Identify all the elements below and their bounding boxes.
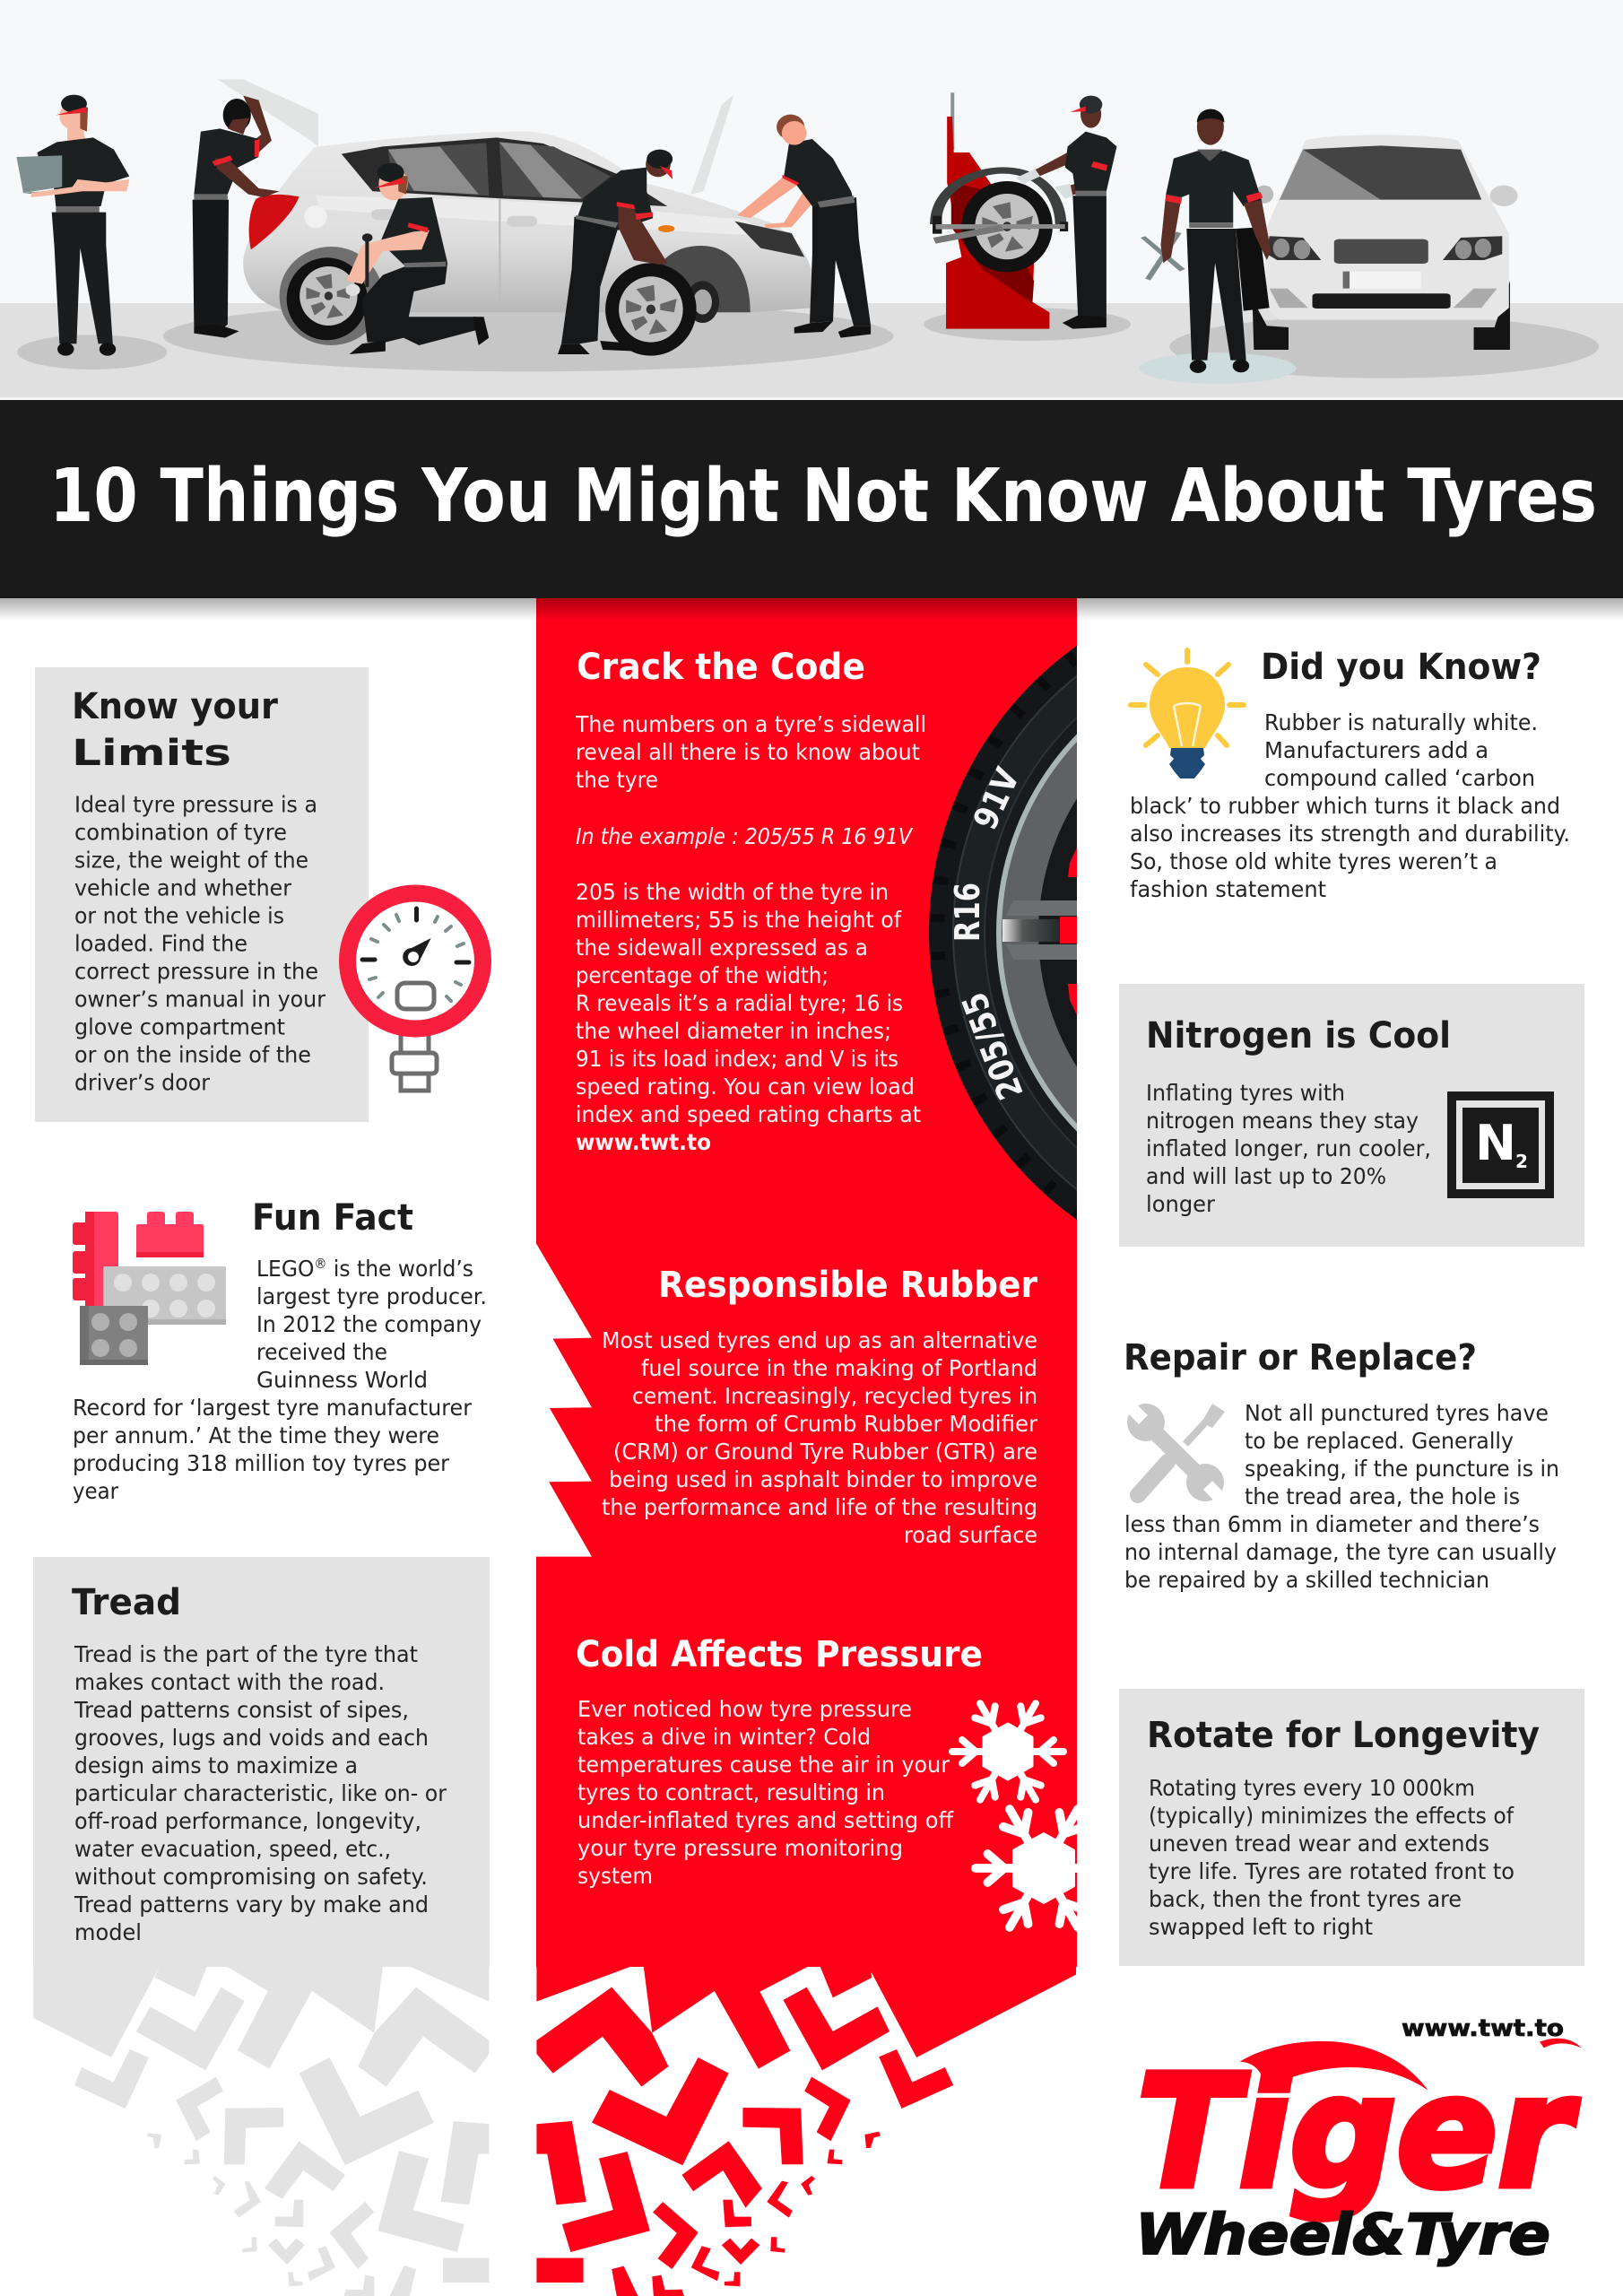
panel: crack the code xyxy=(575,647,926,1155)
heading: Cold Affects Pressure xyxy=(576,1634,983,1675)
body text: less than 6mm in diameter and there’s xyxy=(1124,1511,1540,1537)
header illustration: mechanics working on cars xyxy=(0,0,1623,400)
body text: tyres to contract, resulting in xyxy=(577,1779,885,1805)
body text: Ideal tyre pressure is a xyxy=(74,791,317,818)
body text: Record for ‘largest tyre manufacturer xyxy=(73,1395,473,1421)
panel: did you know xyxy=(1130,647,1570,902)
body text: glove compartment xyxy=(74,1013,285,1040)
icon: tyre pressure gauge xyxy=(348,893,482,1091)
body text: 205 is the width of the tyre in xyxy=(576,879,889,905)
body text xyxy=(575,711,926,1155)
body text xyxy=(74,791,326,1096)
body text: the form of Crumb Rubber Modifier xyxy=(655,1411,1038,1437)
panel: fun fact xyxy=(73,1197,487,1504)
body text: R reveals it’s a radial tyre; 16 is xyxy=(576,990,903,1016)
body text xyxy=(1146,1080,1431,1217)
body text: makes contact with the road. xyxy=(74,1669,385,1695)
body text: reveal all there is to know about xyxy=(576,739,920,765)
image: tyre sidewall xyxy=(929,646,1077,1220)
body text: loaded. Find the xyxy=(74,931,247,956)
body text: compound called ‘carbon xyxy=(1264,765,1535,791)
heading: Crack the Code xyxy=(577,647,865,688)
panel: red centre column xyxy=(535,598,1077,2296)
body text: or not the vehicle is xyxy=(74,902,284,929)
illustration: side view car and four mechanics xyxy=(16,79,893,371)
panel: know your limits xyxy=(35,667,369,1122)
body text: speed rating. You can view load xyxy=(576,1074,915,1100)
figure: mechanic leaning on bonnet xyxy=(737,115,871,338)
body text: received the xyxy=(256,1339,387,1365)
body text: largest tyre producer. xyxy=(256,1283,487,1309)
body text xyxy=(1130,709,1570,902)
figure: balancing machine with wheel xyxy=(933,92,1068,329)
body text: Ever noticed how tyre pressure xyxy=(577,1696,912,1722)
panel: responsible rubber xyxy=(602,1265,1038,1548)
body text: ® xyxy=(314,1256,326,1272)
body text: no internal damage, the tyre can usually xyxy=(1124,1539,1557,1565)
heading: Know your xyxy=(72,686,278,727)
body text: Tread patterns vary by make and xyxy=(74,1892,429,1918)
body text: road surface xyxy=(904,1522,1037,1548)
body text: Not all punctured tyres have xyxy=(1245,1400,1549,1426)
body text: off-road performance, longevity, xyxy=(74,1808,421,1834)
tyre label: R16: R16 xyxy=(948,883,987,942)
icon: snowflake xyxy=(952,1698,1063,1805)
body text: is the world’s xyxy=(326,1256,473,1282)
body text: system xyxy=(577,1863,653,1889)
icon: N2 element tile: 2 xyxy=(1515,1151,1528,1172)
body text: longer xyxy=(1146,1191,1216,1217)
panel: nitrogen is cool xyxy=(1119,984,1584,1247)
heading: Rotate for Longevity xyxy=(1147,1715,1540,1756)
logo url: www.twt.to xyxy=(1402,2015,1564,2042)
heading: Responsible Rubber xyxy=(658,1265,1037,1306)
body text: particular characteristic, like on- or xyxy=(74,1780,447,1806)
body text: back, then the front tyres are xyxy=(1149,1886,1462,1912)
body text: nitrogen means they stay xyxy=(1146,1108,1419,1134)
body text: www.twt.to xyxy=(576,1129,711,1155)
body text: producing 318 million toy tyres per xyxy=(73,1450,450,1476)
body text: design aims to maximize a xyxy=(74,1752,358,1779)
body text: inflated longer, run cooler, xyxy=(1146,1135,1431,1161)
body text: being used in asphalt binder to improve xyxy=(609,1466,1037,1492)
shadow under title bar xyxy=(0,598,1623,621)
body text: the tread area, the hole is xyxy=(1245,1483,1520,1509)
body text: Most used tyres end up as an alternative xyxy=(602,1327,1037,1353)
body text: fashion statement xyxy=(1130,876,1326,902)
body text: percentage of the width; xyxy=(576,962,829,988)
body text: year xyxy=(73,1478,119,1504)
body text: under-inflated tyres and setting off xyxy=(577,1807,954,1833)
title bar xyxy=(0,400,1623,598)
figure: mechanic with laptop xyxy=(16,95,129,356)
body text xyxy=(74,1641,447,1945)
figure: mechanic at open boot xyxy=(193,96,280,338)
body text: correct pressure in the xyxy=(74,958,318,985)
body text: So, those old white tyres weren’t a xyxy=(1130,848,1497,874)
icon: N2 element tile xyxy=(1447,1091,1554,1198)
body text xyxy=(1149,1775,1515,1940)
body text: LEGO xyxy=(256,1256,318,1282)
body text: cement. Increasingly, recycled tyres in xyxy=(632,1383,1037,1409)
figure: kneeling mechanic with gauge xyxy=(345,163,489,354)
body text: your tyre pressure monitoring xyxy=(577,1835,903,1861)
body text: the performance and life of the resulting xyxy=(602,1494,1037,1520)
body text: Manufacturers add a xyxy=(1264,737,1488,763)
logo: Tiger Wheel & Tyre xyxy=(1135,2015,1582,2267)
body text: model xyxy=(74,1919,142,1945)
body text: (CRM) or Ground Tyre Rubber (GTR) are xyxy=(613,1439,1037,1465)
body text: uneven tread wear and extends xyxy=(1149,1831,1489,1857)
body text: In the example : 205/55 R 16 91V xyxy=(576,823,914,849)
body text xyxy=(1124,1400,1559,1593)
figure: front view car xyxy=(1253,135,1518,350)
body text: millimeters; 55 is the height of xyxy=(576,907,902,933)
body text: speaking, if the puncture is in xyxy=(1245,1456,1559,1482)
body text: Rotating tyres every 10 000km xyxy=(1149,1775,1475,1801)
body text: 91 is its load index; and V is its xyxy=(576,1046,898,1072)
body text: takes a dive in winter? Cold xyxy=(577,1724,871,1750)
grey tread pattern xyxy=(33,1967,489,2296)
body text: vehicle and whether xyxy=(74,875,292,900)
figure: mechanic at balancer xyxy=(1016,96,1116,329)
body text: without compromising on safety. xyxy=(74,1864,428,1890)
heading: Limits xyxy=(72,733,231,774)
body text: (typically) minimizes the effects of xyxy=(1149,1803,1515,1829)
body text: the sidewall expressed as a xyxy=(576,935,868,961)
heading: Did you Know? xyxy=(1261,647,1541,688)
body text xyxy=(73,1256,487,1504)
tyre label: 91V: 91V xyxy=(966,762,1028,835)
icon: light bulb xyxy=(1131,650,1244,778)
icon: wrench and screwdriver xyxy=(1123,1399,1228,1507)
body text: temperatures cause the air in your xyxy=(577,1752,950,1778)
panel: repair or replace xyxy=(1123,1337,1559,1593)
body text: Tread patterns consist of sipes, xyxy=(74,1697,409,1723)
body text: owner’s manual in your xyxy=(74,987,326,1012)
body text: the wheel diameter in inches; xyxy=(576,1018,891,1044)
zig-zag torn edge xyxy=(535,1242,592,1557)
logo wordmark: Tiger: Tiger xyxy=(1137,2041,1579,2222)
body text: to be replaced. Generally xyxy=(1245,1428,1514,1454)
body text: fuel source in the making of Portland xyxy=(641,1355,1037,1381)
panel: rotate for longevity xyxy=(1119,1689,1584,1966)
body text: water evacuation, speed, etc., xyxy=(74,1836,391,1862)
heading: Nitrogen is Cool xyxy=(1146,1015,1451,1057)
illustration: wheel balancer, mechanics and front view car xyxy=(924,92,1599,384)
panel: cold affects pressure xyxy=(576,1634,1112,1935)
icon: toy bricks xyxy=(73,1212,226,1365)
tyre label: 205/55: 205/55 xyxy=(954,987,1031,1105)
figure: mechanic with wrench and tyre xyxy=(1141,109,1271,373)
body text: black’ to rubber which turns it black and xyxy=(1130,793,1560,819)
body text: tyre life. Tyres are rotated front to xyxy=(1149,1858,1515,1884)
figure: mechanic lifting tyre xyxy=(558,150,673,354)
body text: The numbers on a tyre’s sidewall xyxy=(575,711,926,737)
body text xyxy=(577,1696,954,1889)
body text: size, the weight of the xyxy=(74,847,308,874)
body text: In 2012 the company xyxy=(256,1311,482,1337)
body text: per annum.’ At the time they were xyxy=(73,1422,439,1448)
logo swooshes xyxy=(1240,2039,1582,2091)
body text: Rubber is naturally white. xyxy=(1264,709,1538,735)
body text: index and speed rating charts at xyxy=(576,1101,921,1127)
body text: combination of tyre xyxy=(74,820,287,845)
heading xyxy=(72,686,278,774)
body text: driver’s door xyxy=(74,1069,211,1096)
body text: also increases its strength and durability. xyxy=(1130,821,1570,847)
heading: Repair or Replace? xyxy=(1124,1337,1477,1378)
body text: grooves, lugs and voids and each xyxy=(74,1725,429,1751)
body text: be repaired by a skilled technician xyxy=(1124,1567,1489,1593)
body text: or on the inside of the xyxy=(74,1042,311,1067)
body text: swapped left to right xyxy=(1149,1914,1373,1940)
red tread pattern xyxy=(536,1967,1076,2296)
logo wordmark: Wheel&amp;Tyre: Wheel&Tyre xyxy=(1135,2202,1550,2267)
body text: Inflating tyres with xyxy=(1146,1080,1345,1106)
panel: tread xyxy=(33,1557,490,2296)
heading: Fun Fact xyxy=(252,1197,413,1239)
heading: Tread xyxy=(72,1582,181,1623)
body text: Tread is the part of the tyre that xyxy=(74,1641,418,1667)
body text: the tyre xyxy=(576,767,658,793)
body text: and will last up to 20% xyxy=(1146,1163,1386,1189)
icon: N2 element tile: N xyxy=(1475,1115,1516,1171)
icon: snowflake large xyxy=(976,1802,1112,1935)
body text: Guinness World xyxy=(256,1367,428,1393)
body text xyxy=(602,1327,1038,1548)
